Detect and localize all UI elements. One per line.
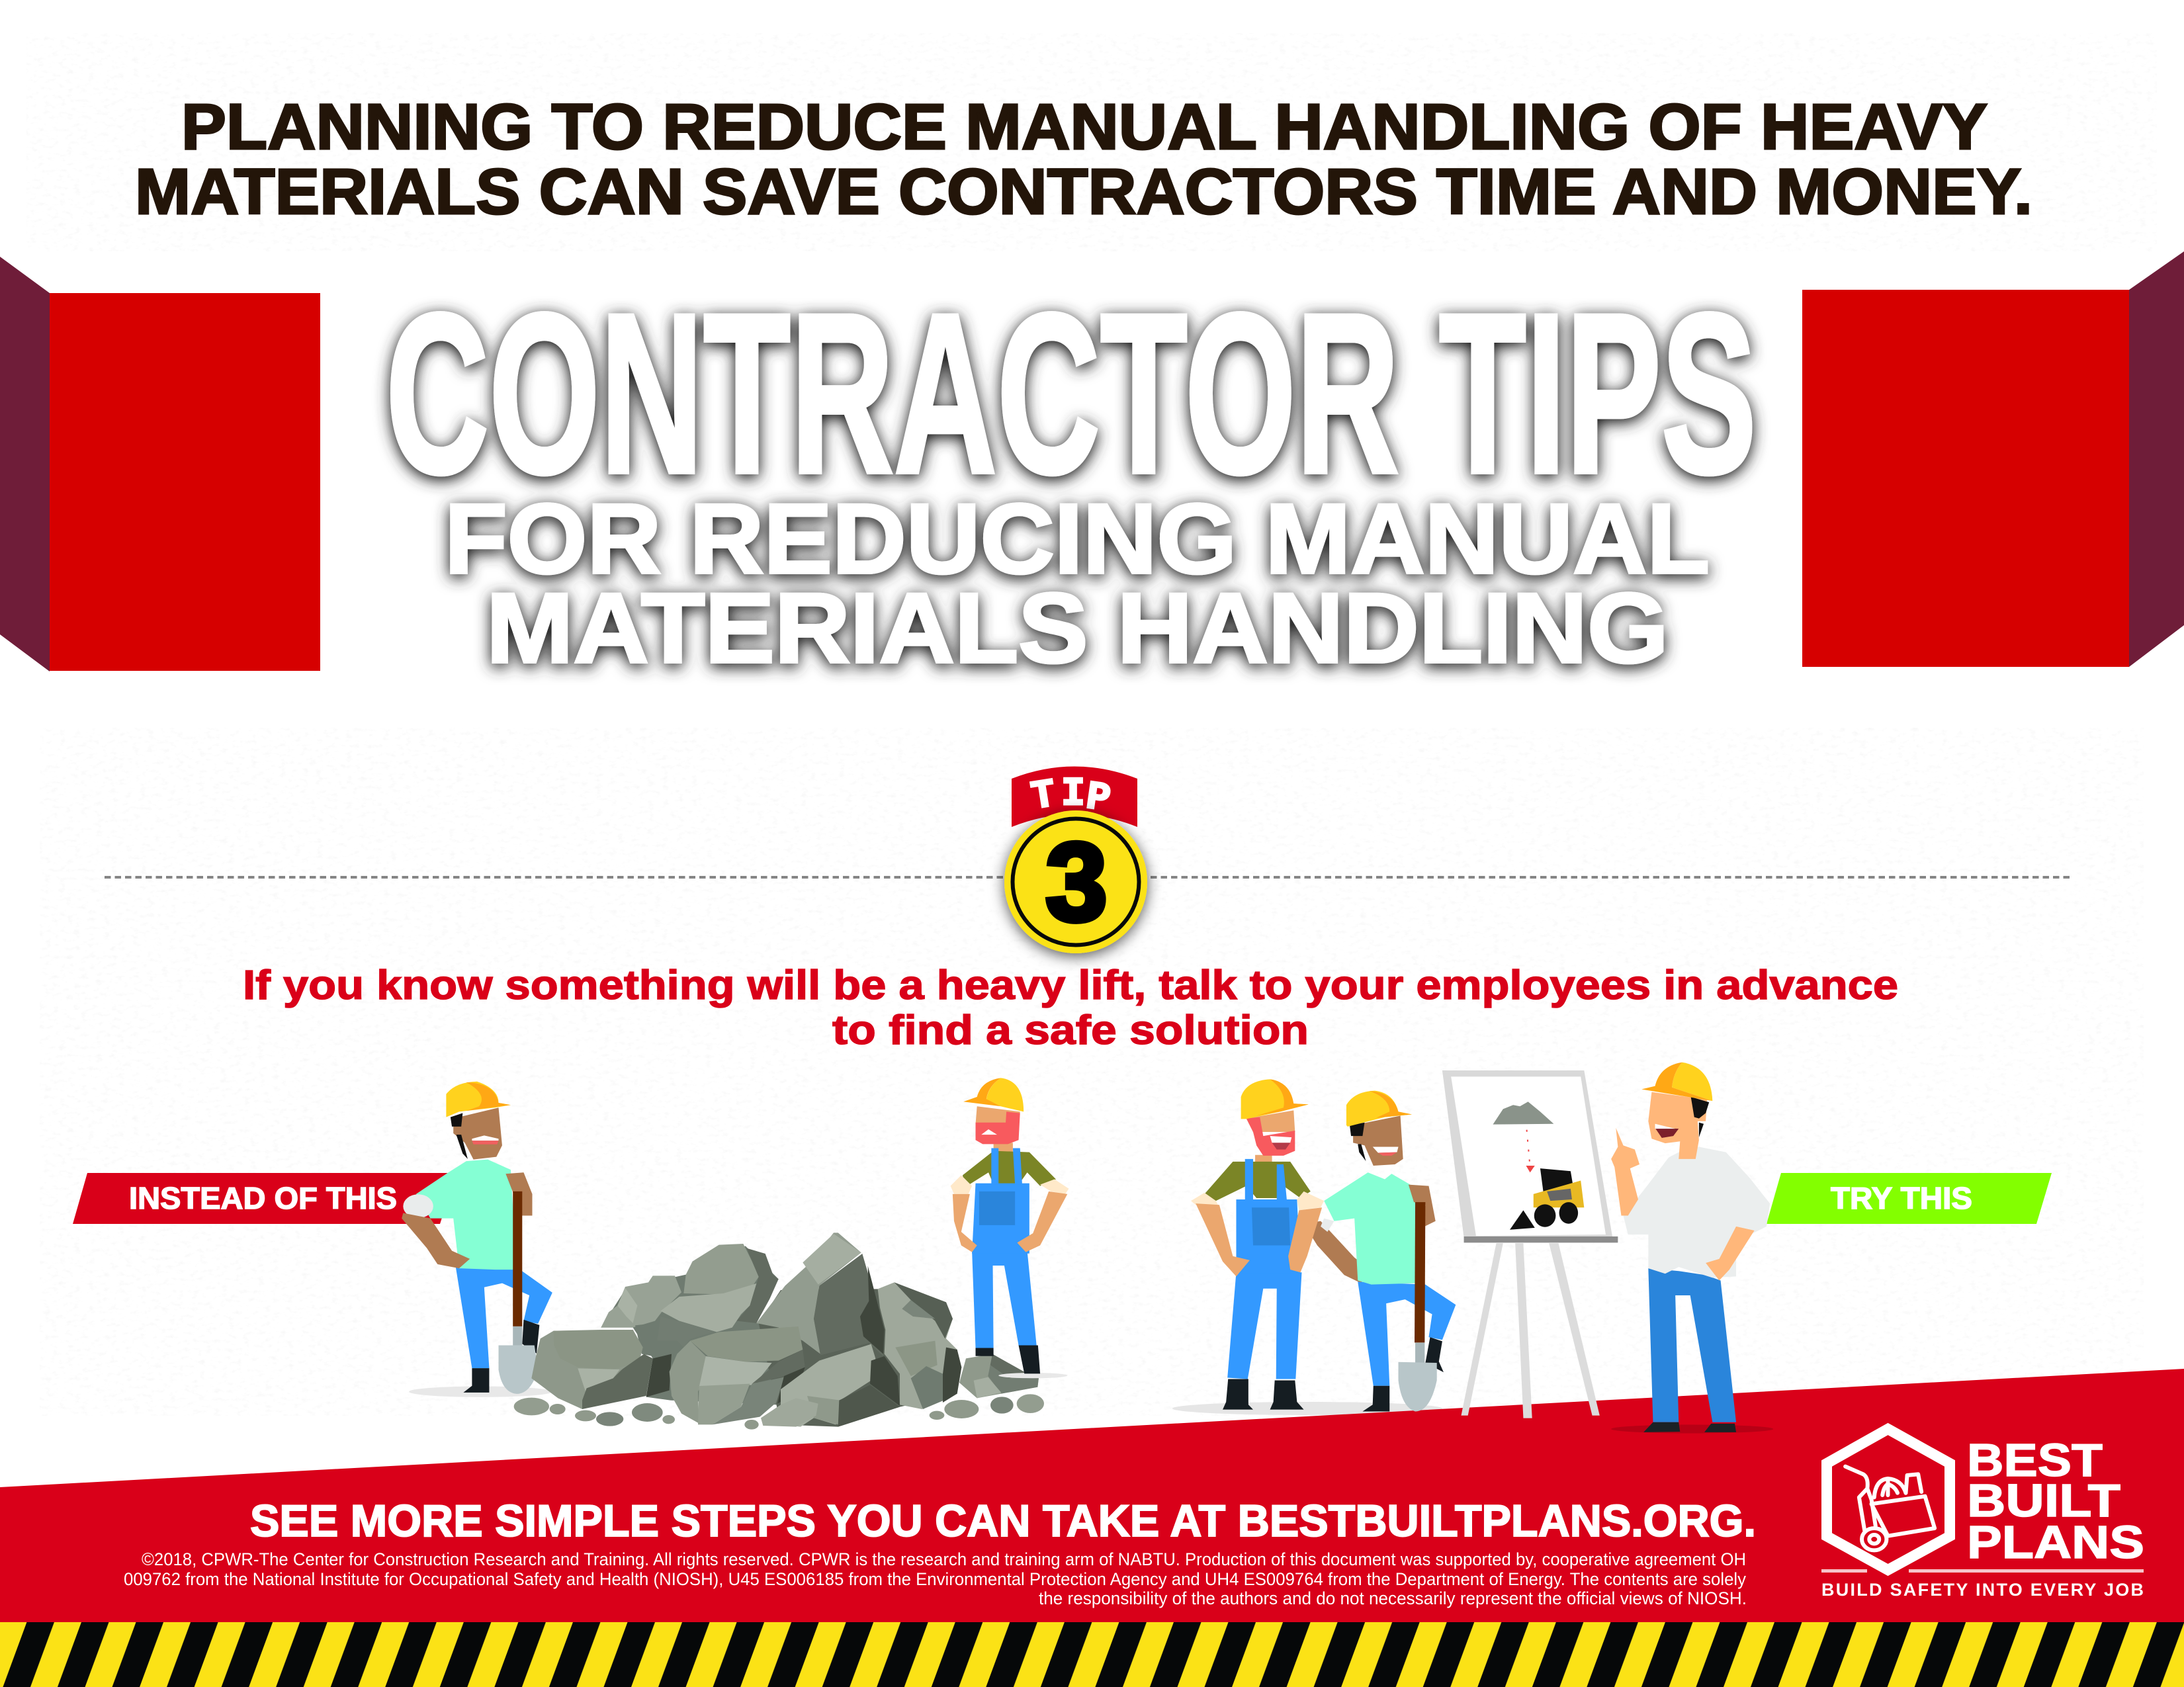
copyright fine print bbox=[124, 1549, 1747, 1608]
copyright fine print: 009762 from the National Institute for Occupational Safety and Health (NIOSH), U45 ES006185 from the Environmental Protection Agency and UH4 ES009764 from the Department of Energy. The contents are solely bbox=[124, 1569, 1746, 1589]
headline: planning statement bbox=[135, 91, 2032, 228]
illustration: foreman pointing bbox=[1611, 1062, 1773, 1434]
tip ribbon bbox=[1012, 766, 1137, 827]
instead of this label bbox=[73, 1173, 457, 1224]
logo wordmark bbox=[1967, 1434, 2144, 1568]
tip description: to find a safe solution bbox=[832, 1008, 1309, 1053]
illustration: overalls worker, happy bbox=[1191, 1079, 1324, 1410]
try this label: TRY THIS bbox=[1831, 1181, 1972, 1215]
copyright fine print: ©2018, CPWR-The Center for Construction Research and Training. All rights reserved. CPWR is the research and training arm of NABTU. Production of this document was supported by, cooperative agreement OH bbox=[142, 1549, 1746, 1569]
main title: MATERIALS HANDLING bbox=[486, 572, 1669, 683]
tip description bbox=[243, 963, 1898, 1053]
logo wordmark: BUILT bbox=[1967, 1475, 2120, 1526]
tip 3 badge bbox=[1004, 766, 1147, 953]
left red side panel bbox=[0, 257, 320, 671]
ground shadow: happy workers bbox=[1172, 1402, 1442, 1415]
footer call to action: SEE MORE SIMPLE STEPS YOU CAN TAKE AT BESTBUILTPLANS.ORG. bbox=[250, 1496, 1756, 1546]
number circle bbox=[1004, 810, 1147, 953]
logo wordmark: PLANS bbox=[1967, 1516, 2144, 1568]
main title: FOR REDUCING MANUAL bbox=[445, 483, 1710, 594]
illustration: overalls worker, angry bbox=[951, 1078, 1069, 1378]
small stones bbox=[514, 1398, 818, 1430]
number circle: 3 bbox=[1045, 820, 1108, 944]
logo rule bbox=[1821, 1569, 2144, 1573]
front rocks bbox=[531, 1326, 805, 1424]
headline: planning statement: MATERIALS CAN SAVE CONTRACTORS TIME AND MONEY. bbox=[135, 155, 2032, 228]
mini rock pile bbox=[1493, 1102, 1553, 1125]
logo tagline: BUILD SAFETY INTO EVERY JOB bbox=[1821, 1580, 2144, 1600]
illustration: worker with shovel, happy bbox=[1304, 1091, 1456, 1411]
illustration: rock pile bbox=[514, 1233, 1044, 1430]
skid steer loader bbox=[1510, 1168, 1584, 1230]
back rocks bbox=[601, 1244, 779, 1356]
logo wordmark: BEST bbox=[1967, 1434, 2103, 1486]
icon: hexagon bbox=[1827, 1429, 1950, 1570]
red footer band bbox=[0, 1369, 2184, 1623]
best built plans logo bbox=[1821, 1429, 2144, 1600]
illustration: easel with lift plan bbox=[1442, 1070, 1618, 1418]
tip ribbon: TIP bbox=[1028, 772, 1113, 823]
tip description: If you know something will be a heavy lift, talk to your employees in advance bbox=[243, 963, 1898, 1008]
icon: hand truck bbox=[1845, 1467, 1935, 1550]
main title bbox=[386, 267, 1757, 683]
illustration: worker with shovel, angry bbox=[402, 1082, 552, 1397]
hazard stripe bbox=[0, 1622, 2184, 1687]
rock pile silhouette backing bbox=[601, 1246, 957, 1427]
copyright fine print: the responsibility of the authors and do not necessarily represent the official views of NIOSH. bbox=[1039, 1588, 1747, 1608]
dashed red arrow bbox=[1527, 1130, 1530, 1167]
try this label bbox=[1767, 1173, 2052, 1224]
right red side panel bbox=[1802, 251, 2184, 667]
headline: planning statement: PLANNING TO REDUCE MANUAL HANDLING OF HEAVY bbox=[181, 91, 1987, 163]
instead of this label: INSTEAD OF THIS bbox=[129, 1181, 397, 1215]
